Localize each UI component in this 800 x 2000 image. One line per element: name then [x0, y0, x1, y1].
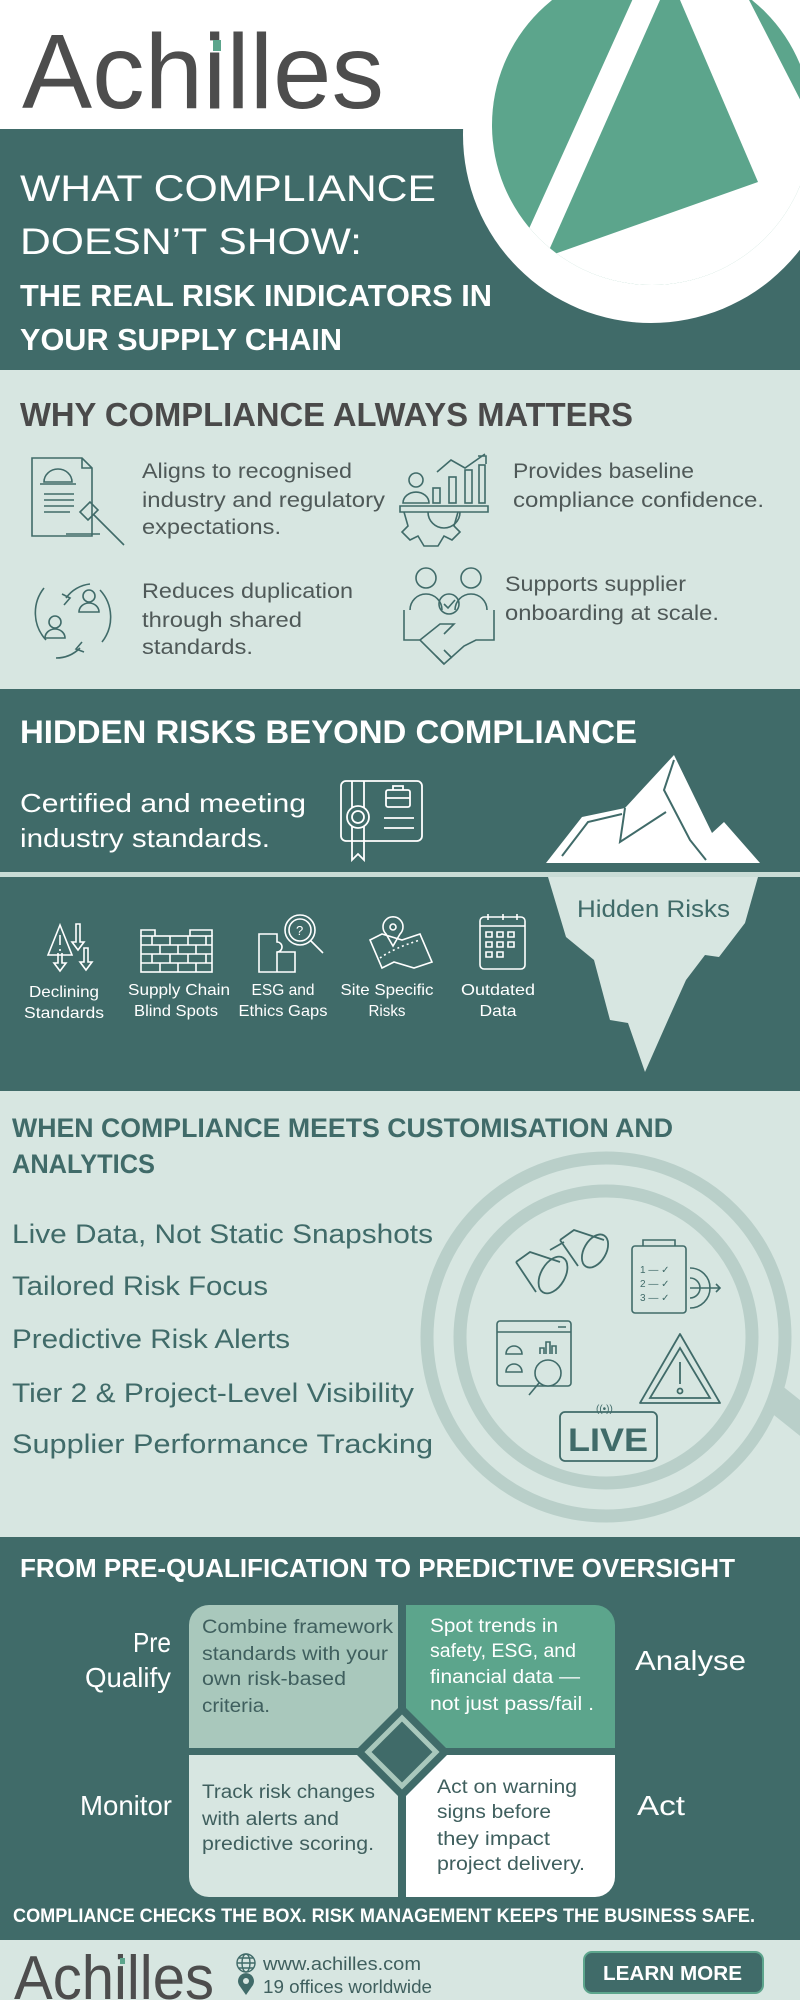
quadrant: analyse	[406, 1605, 615, 1748]
iceberg underwater: Hidden Risks	[577, 896, 730, 923]
panel: hidden risks	[0, 689, 800, 1091]
quadrant: analyse: Spot trends in	[430, 1616, 558, 1637]
icon: checklist target: 2 — ✓	[640, 1279, 670, 1290]
icon: certificate	[341, 781, 422, 860]
panel: why compliance matters	[0, 370, 800, 689]
icon labels: Declining	[29, 984, 99, 1001]
text: certified: Certified and meeting	[20, 788, 306, 818]
text: certified	[20, 788, 306, 853]
quadrant: act: they impact	[437, 1829, 551, 1850]
text: aligns	[142, 460, 386, 539]
stage labels: Qualify	[85, 1662, 171, 1693]
heading: FROM PRE-QUALIFICATION TO PREDICTIVE OVERSIGHT	[20, 1553, 735, 1583]
icon labels: Data	[480, 1003, 517, 1020]
quadrant: analyse: not just pass/fail .	[430, 1694, 594, 1715]
icon labels: Site Specific	[340, 982, 434, 999]
text: aligns: industry and regulatory	[142, 489, 386, 512]
panel: customisation and analytics	[0, 1091, 800, 1537]
stage labels: Act	[637, 1790, 685, 1821]
list: Predictive Risk Alerts	[12, 1324, 290, 1354]
text: reduces: through shared	[142, 609, 302, 632]
quadrant: act: project delivery.	[437, 1854, 585, 1875]
quadrant: act	[406, 1755, 615, 1897]
iceberg top	[546, 755, 760, 863]
text: reduces	[142, 580, 353, 659]
icon labels: Standards	[24, 1005, 104, 1022]
icon labels: Blind Spots	[134, 1003, 218, 1020]
contact text: www.achilles.com	[262, 1954, 421, 1974]
quadrant: monitor: Track risk changes	[202, 1782, 375, 1803]
quadrant: analyse: safety, ESG, and	[430, 1641, 576, 1662]
center diamond	[354, 1704, 450, 1800]
text: aligns: Aligns to recognised	[142, 460, 352, 483]
quadrant: pre qualify: criteria.	[202, 1696, 270, 1717]
icon: dashboard	[497, 1321, 571, 1395]
stage labels: Analyse	[635, 1645, 746, 1676]
icon: calendar	[480, 914, 525, 969]
title	[20, 168, 492, 357]
icon: pin	[238, 1973, 254, 1995]
contact text	[262, 1954, 432, 1997]
icon labels	[24, 982, 535, 1022]
list: Live Data, Not Static Snapshots	[12, 1219, 433, 1249]
icon: declining standards	[48, 924, 92, 971]
title: DOESN’T SHOW:	[20, 221, 362, 262]
icon: people handshake	[404, 568, 494, 664]
icon: warning	[640, 1334, 720, 1403]
heading	[12, 1113, 673, 1179]
logo circle	[463, 0, 800, 323]
icon: checklist target	[632, 1240, 720, 1313]
list: Tier 2 & Project-Level Visibility	[12, 1378, 415, 1408]
list: Tailored Risk Focus	[12, 1271, 268, 1301]
icon: chart gear	[400, 454, 488, 546]
tagline: COMPLIANCE CHECKS THE BOX. RISK MANAGEMENT KEEPS THE BUSINESS SAFE.	[13, 1906, 755, 1927]
text: provides: compliance confidence.	[513, 489, 764, 512]
icon: checklist target: 1 — ✓	[640, 1265, 670, 1276]
quadrant: pre qualify: standards with your	[202, 1644, 389, 1665]
text: provides	[513, 460, 764, 512]
logo text: Achilles	[22, 13, 384, 131]
contact text: 19 offices worldwide	[263, 1977, 432, 1997]
quadrant: act: Act on warning	[437, 1777, 577, 1798]
text: certified: industry standards.	[20, 823, 270, 853]
heading: HIDDEN RISKS BEYOND COMPLIANCE	[20, 714, 637, 750]
heading: WHEN COMPLIANCE MEETS CUSTOMISATION AND	[12, 1113, 673, 1143]
icon: circular people	[35, 584, 111, 658]
header band	[0, 129, 800, 370]
text: aligns: expectations.	[142, 516, 281, 539]
quadrant: analyse: financial data —	[430, 1667, 580, 1688]
magnifier	[427, 1158, 800, 1516]
quadrant: pre qualify	[189, 1605, 398, 1748]
icon: puzzle magnifier: ?	[296, 923, 303, 938]
icon: map pin	[370, 917, 432, 968]
icon labels: ESG and	[252, 982, 314, 999]
icon: globe	[237, 1954, 255, 1972]
title: YOUR SUPPLY CHAIN	[20, 322, 342, 357]
text: supports: onboarding at scale.	[505, 602, 719, 625]
stage labels	[80, 1627, 746, 1821]
quadrant: act: signs before	[437, 1802, 551, 1823]
icon labels: Ethics Gaps	[238, 1003, 328, 1020]
quadrant: pre qualify: Combine framework	[202, 1617, 394, 1638]
text: reduces: Reduces duplication	[142, 580, 353, 603]
list	[12, 1219, 433, 1459]
icon labels: Supply Chain	[128, 982, 230, 999]
icon: puzzle magnifier	[259, 915, 323, 972]
stage labels: Monitor	[80, 1790, 172, 1821]
text: provides: Provides baseline	[513, 460, 694, 483]
heading: WHY COMPLIANCE ALWAYS MATTERS	[20, 396, 633, 433]
iceberg underwater	[548, 877, 758, 1072]
icon: live: LIVE	[568, 1422, 648, 1458]
list: Supplier Performance Tracking	[12, 1429, 433, 1459]
button: learn more: LEARN MORE	[603, 1963, 742, 1985]
heading: ANALYTICS	[12, 1149, 155, 1179]
quadrant: monitor: predictive scoring.	[202, 1834, 374, 1855]
icon labels: Risks	[368, 1003, 406, 1020]
title: THE REAL RISK INDICATORS IN	[20, 278, 492, 313]
text: supports	[505, 573, 719, 625]
icon: live	[560, 1404, 657, 1461]
text: supports: Supports supplier	[505, 573, 686, 596]
quadrant: monitor	[189, 1755, 398, 1897]
icon labels: Outdated	[461, 982, 535, 999]
title: WHAT COMPLIANCE	[20, 168, 436, 209]
icon: brick wall	[141, 930, 212, 972]
waterline	[0, 872, 800, 877]
button: learn more	[584, 1952, 763, 1993]
icon: checklist target: 3 — ✓	[640, 1293, 670, 1304]
icon: binoculars	[516, 1230, 614, 1298]
quadrant: pre qualify: own risk-based	[202, 1669, 346, 1690]
stage labels: Pre	[133, 1627, 171, 1658]
icon: live: ((•))	[596, 1404, 613, 1415]
text: reduces: standards.	[142, 636, 253, 659]
footer	[0, 1940, 800, 2000]
icon: document gavel	[32, 458, 124, 545]
panel: predictive oversight	[0, 1537, 800, 1940]
quadrant: monitor: with alerts and	[201, 1809, 339, 1830]
